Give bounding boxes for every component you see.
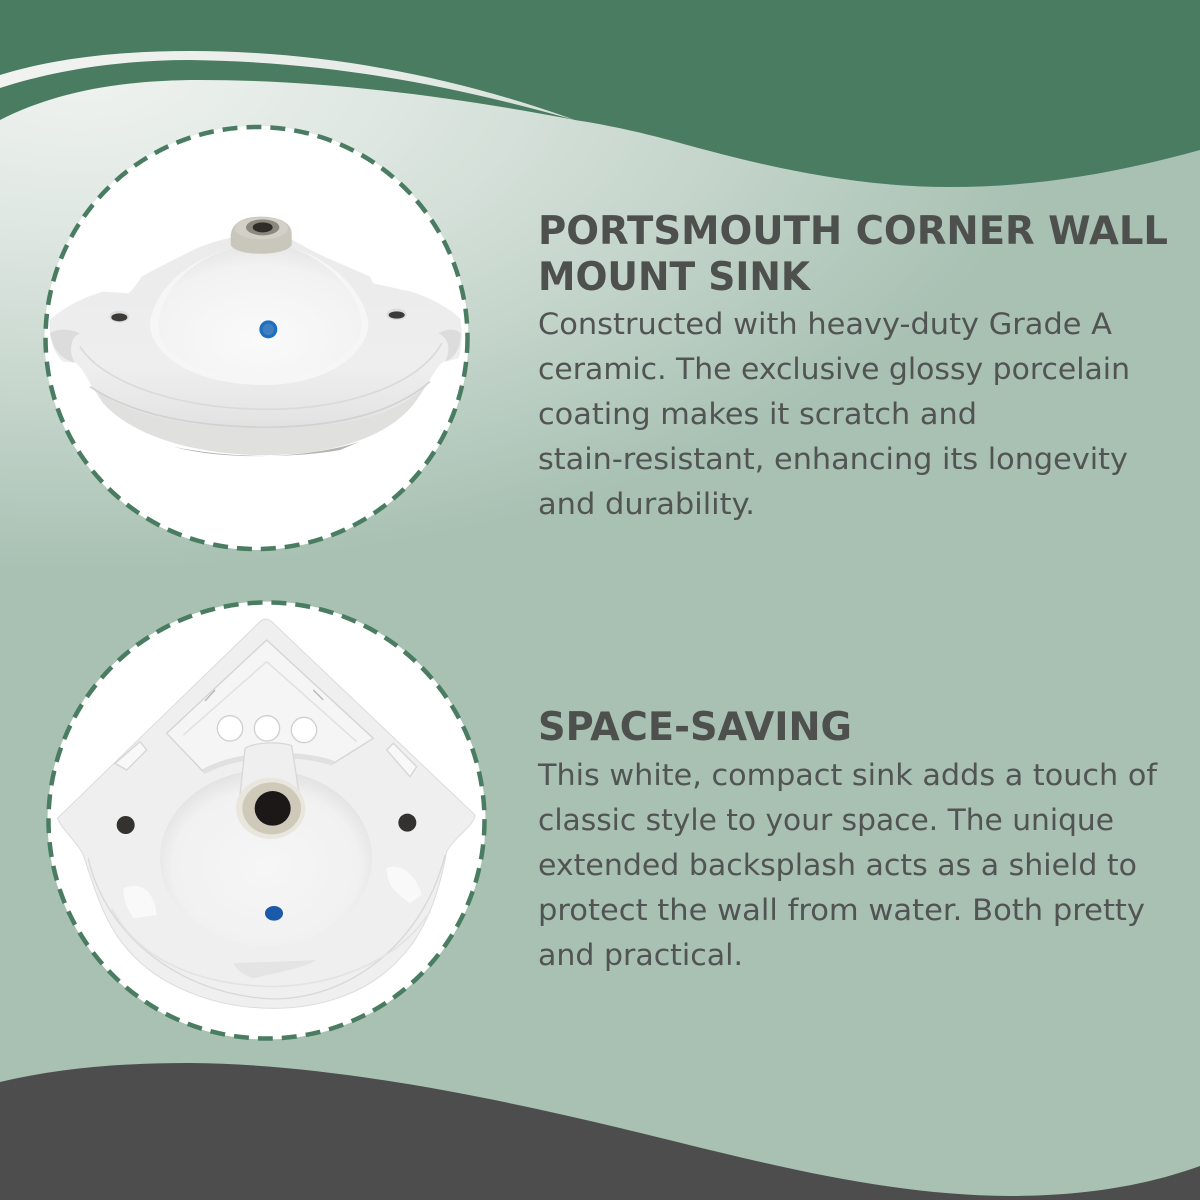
body text: construction: Constructed with heavy-duty Grade A bbox=[538, 307, 1112, 341]
heading: Space-Saving: SPACE-SAVING bbox=[538, 705, 852, 750]
heading: Portsmouth Corner Wall Mount Sink: MOUNT SINK bbox=[538, 255, 812, 300]
heading: Portsmouth Corner Wall Mount Sink bbox=[538, 209, 1168, 300]
body text: construction: and durability. bbox=[538, 487, 755, 521]
body text: construction: stain-resistant, enhancing its longevity bbox=[538, 442, 1128, 476]
body text: style and backsplash: This white, compact sink adds a touch of bbox=[537, 758, 1158, 792]
body text: style and backsplash: extended backsplash acts as a shield to bbox=[538, 848, 1137, 882]
text block: product overview bbox=[538, 209, 1168, 521]
body text: construction bbox=[538, 307, 1130, 521]
dashed circle frame bbox=[44, 126, 468, 550]
icon: sink top view bbox=[57, 619, 475, 1008]
body text: style and backsplash: and practical. bbox=[538, 938, 743, 972]
icon: sink side view bbox=[50, 217, 462, 456]
body text: construction: coating makes it scratch and bbox=[538, 397, 977, 431]
body text: style and backsplash: classic style to your space. The unique bbox=[538, 803, 1114, 837]
body text: style and backsplash: protect the wall from water. Both pretty bbox=[538, 893, 1145, 927]
bottom dark wave bbox=[0, 1063, 1200, 1200]
top green wave bbox=[0, 0, 1200, 187]
dashed circle frame bbox=[48, 602, 486, 1040]
text block: space-saving bbox=[537, 705, 1158, 972]
body text: construction: ceramic. The exclusive glossy porcelain bbox=[538, 352, 1130, 386]
heading: Portsmouth Corner Wall Mount Sink: PORTSMOUTH CORNER WALL bbox=[538, 209, 1168, 254]
panel: top sink photo bbox=[44, 126, 468, 550]
body text: style and backsplash bbox=[537, 758, 1158, 972]
panel: bottom sink photo bbox=[48, 602, 486, 1040]
white swoosh bbox=[0, 51, 575, 120]
